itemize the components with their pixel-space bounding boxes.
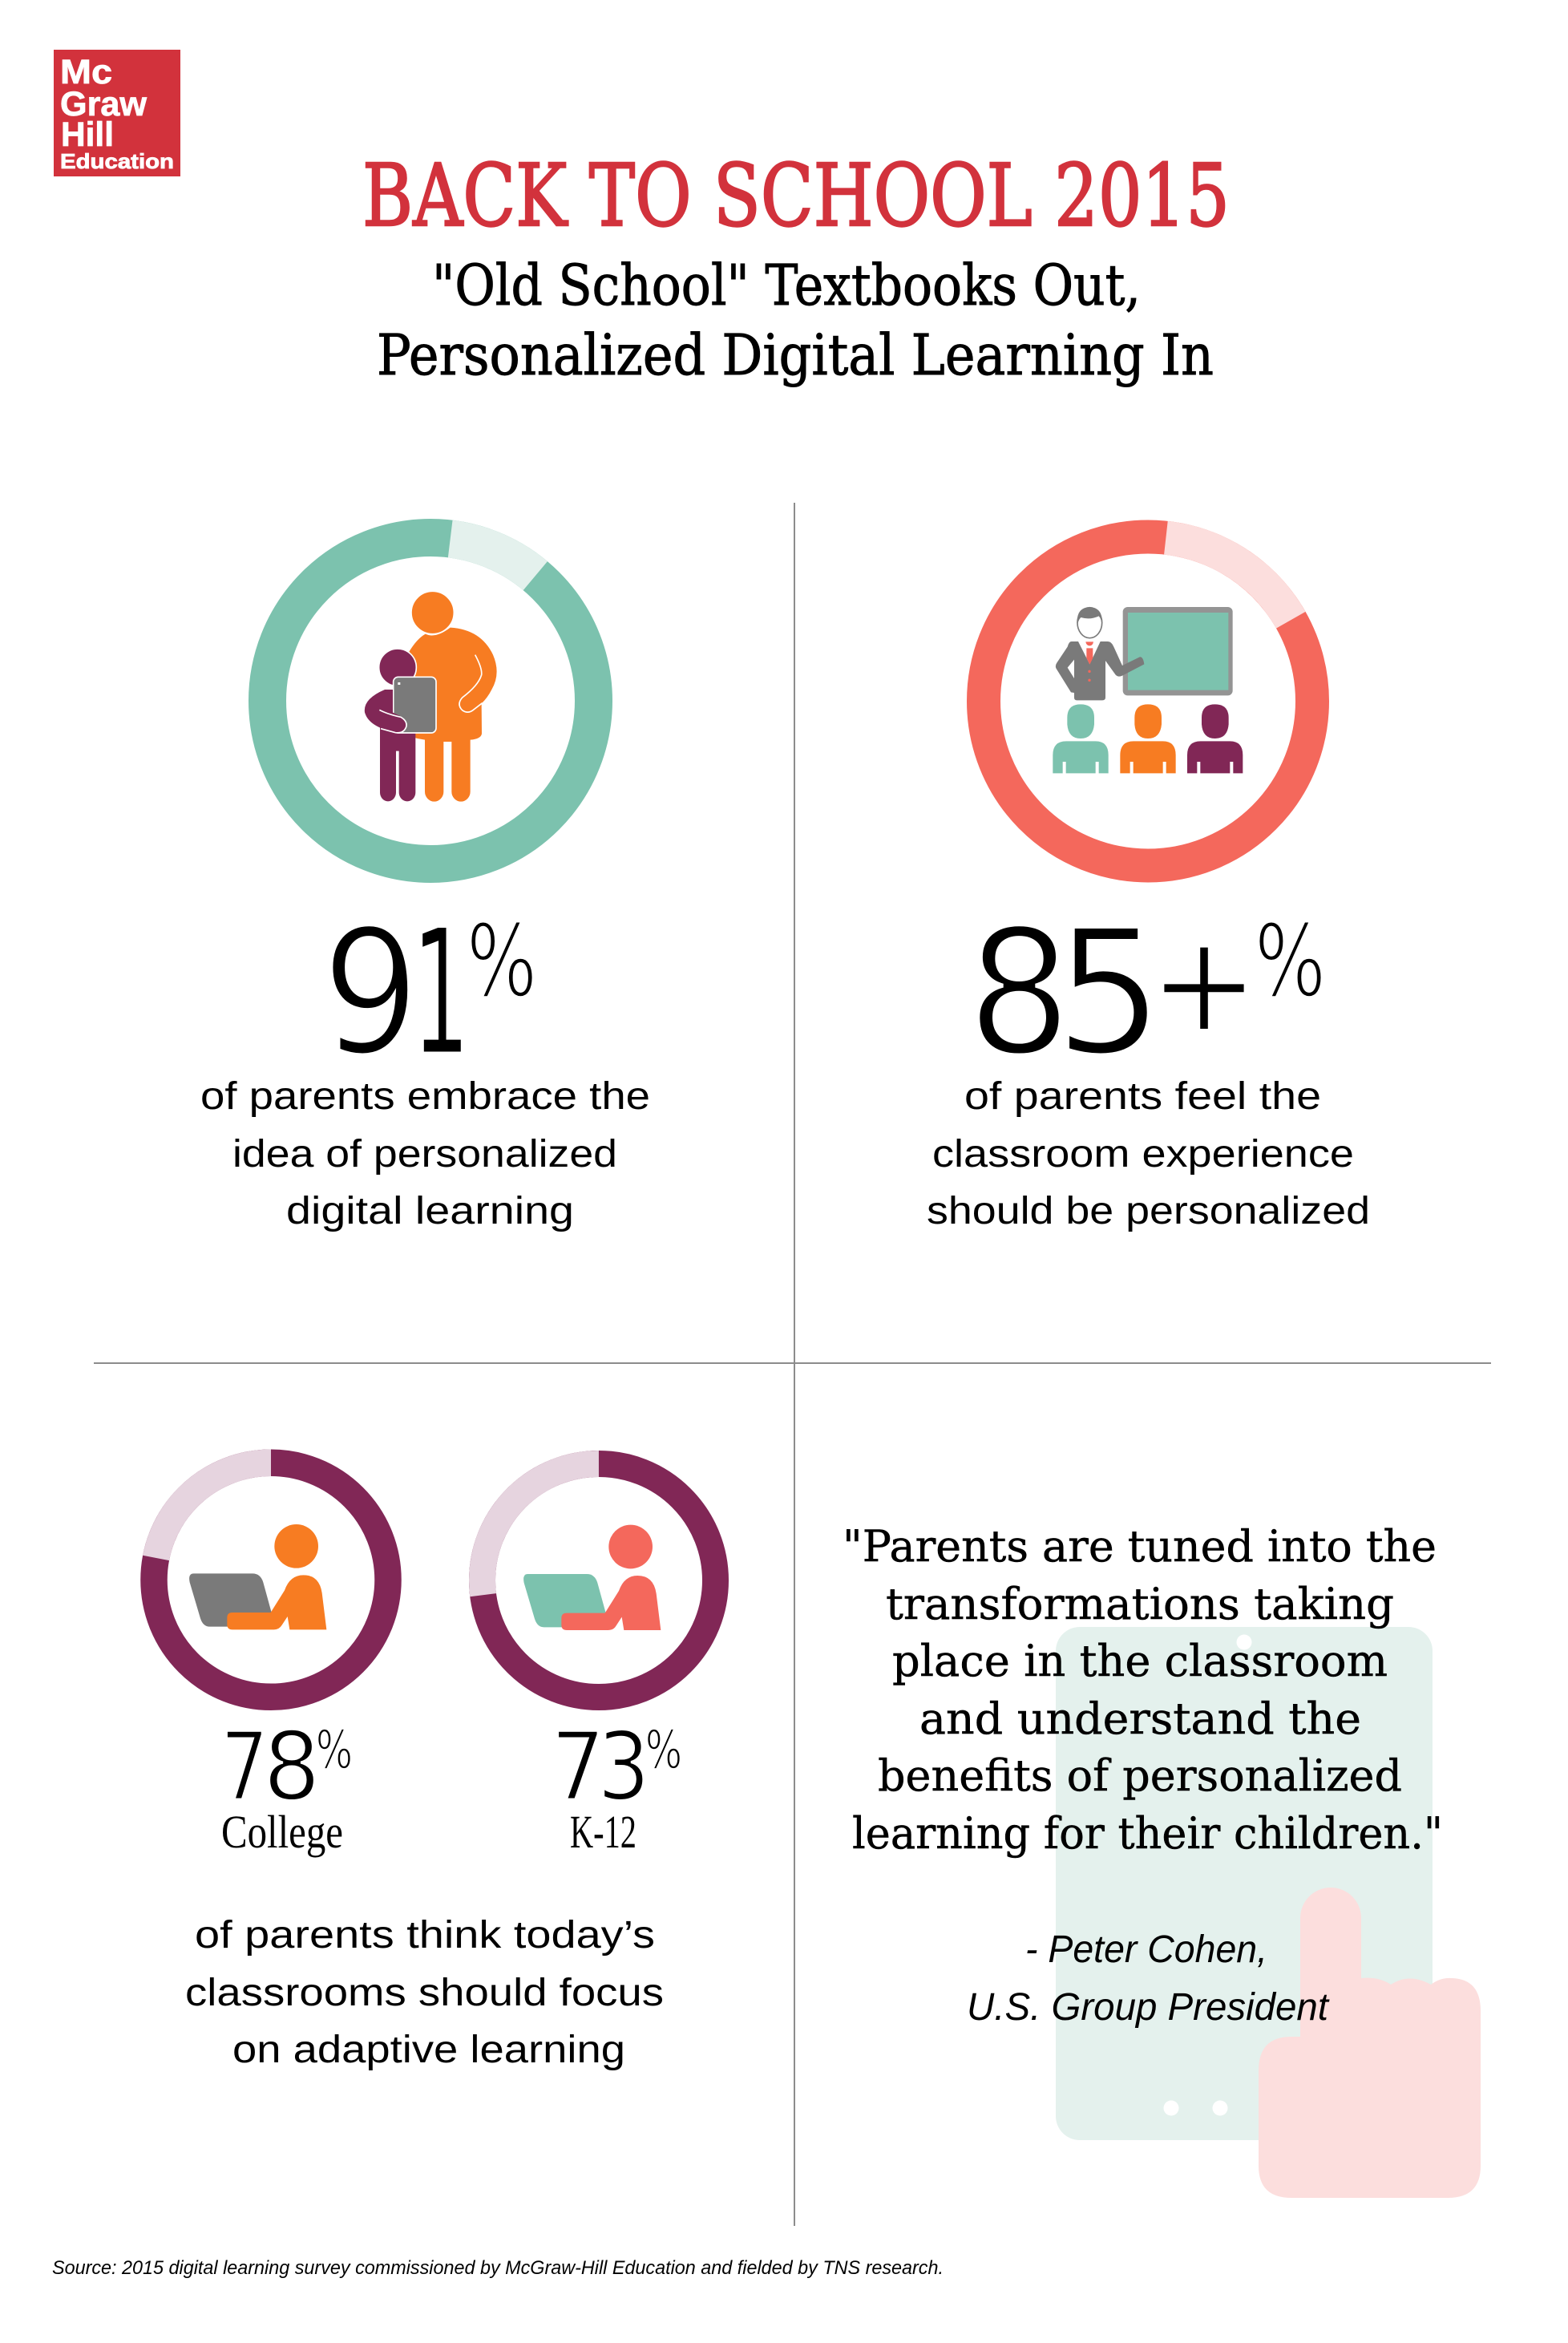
source note: Source: 2015 digital learning survey commissioned by McGraw-Hill Education and fielded by TNS research. — [52, 2257, 944, 2279]
stat: 78 percent: % — [316, 1719, 353, 1781]
logo: McGraw-Hill Education: Hill — [61, 115, 114, 154]
panel: 85 plus percent of parents — [927, 520, 1370, 1232]
quote text: transformations taking — [886, 1579, 1394, 1629]
logo: McGraw-Hill Education: Mc — [60, 53, 112, 91]
text: of parents embrace: digital learning — [286, 1190, 574, 1232]
text: of parents feel: classroom experience — [932, 1133, 1354, 1176]
stat: 78 percent: 7 — [220, 1711, 269, 1822]
label: College: College — [221, 1806, 343, 1858]
stat: 73 percent: 3 — [597, 1711, 650, 1822]
stat: 91 percent: 1 — [412, 892, 470, 1094]
quote text: and understand the — [919, 1694, 1361, 1744]
text: of parents think: classrooms should focus — [185, 1972, 664, 2014]
attribution: U.S. Group President — [967, 1986, 1330, 2029]
icon: parent and child with tablet — [365, 591, 497, 802]
stat: 73 percent — [551, 1711, 682, 1822]
subtitle: "Old School" Textbooks Out, — [432, 253, 1141, 318]
vertical divider — [794, 503, 795, 2226]
stat: 91 percent — [321, 892, 537, 1094]
text: of parents feel — [927, 1075, 1370, 1232]
text: of parents think: on adaptive learning — [232, 2029, 625, 2071]
stat: 85 plus percent: % — [1255, 902, 1326, 1020]
stat: 78 percent — [220, 1711, 353, 1822]
attribution: - Peter Cohen, — [1025, 1928, 1267, 1971]
subtitle — [377, 253, 1214, 388]
horizontal divider — [94, 1362, 1491, 1364]
icon: student at grey laptop — [189, 1524, 326, 1629]
stat: 91 percent: % — [467, 902, 537, 1020]
text: of parents embrace: of parents embrace the — [200, 1075, 650, 1118]
stat: 85 plus percent — [967, 892, 1326, 1094]
donut chart: 73 percent K-12 — [468, 1450, 729, 1711]
stat: 78 percent: 8 — [263, 1711, 321, 1822]
stat: 85 plus percent: + — [1149, 905, 1259, 1062]
quote text: benefits of personalized — [878, 1750, 1402, 1801]
label: K-12: K-12 — [570, 1806, 636, 1858]
text: of parents embrace: idea of personalized — [232, 1133, 617, 1176]
donut chart: 91 percent — [249, 519, 612, 883]
text: of parents feel: should be personalized — [927, 1190, 1370, 1232]
text: of parents embrace — [200, 1075, 650, 1232]
quote text: "Parents are tuned into the — [843, 1521, 1437, 1572]
logo: McGraw-Hill Education — [54, 50, 180, 176]
panel: quote — [843, 1521, 1481, 2198]
stat: 73 percent: % — [645, 1719, 682, 1781]
icon: student at teal laptop — [523, 1525, 661, 1630]
donut chart: 85 percent — [967, 520, 1329, 883]
text: of parents think — [185, 1914, 664, 2071]
icon: tablet — [1056, 1627, 1433, 2140]
attribution — [967, 1928, 1330, 2029]
quote text: place in the classroom — [892, 1636, 1388, 1686]
text: of parents feel: of parents feel the — [964, 1075, 1321, 1118]
subtitle: Personalized Digital Learning In — [377, 322, 1214, 388]
stat: 91 percent: 9 — [321, 892, 420, 1094]
stat: 85 plus percent: 5 — [1054, 892, 1164, 1094]
icon: pointing hand — [1259, 1888, 1481, 2198]
panel: 91 percent of parents — [200, 519, 650, 1232]
logo: McGraw-Hill Education: Education — [60, 149, 174, 173]
title: BACK TO SCHOOL 2015 — [362, 147, 1230, 246]
donut chart: 78 percent college — [134, 1443, 408, 1717]
stat: 85 plus percent: 8 — [967, 892, 1072, 1094]
quote text: learning for their children." — [852, 1808, 1443, 1859]
stat: 73 percent: 7 — [551, 1711, 605, 1822]
quote text — [843, 1521, 1443, 1859]
icon: teacher with board and students — [1053, 607, 1243, 773]
panel: adaptive learning — [134, 1443, 729, 2071]
text: of parents think: of parents think today’s — [195, 1914, 655, 1957]
logo: McGraw-Hill Education: Graw — [60, 85, 148, 123]
